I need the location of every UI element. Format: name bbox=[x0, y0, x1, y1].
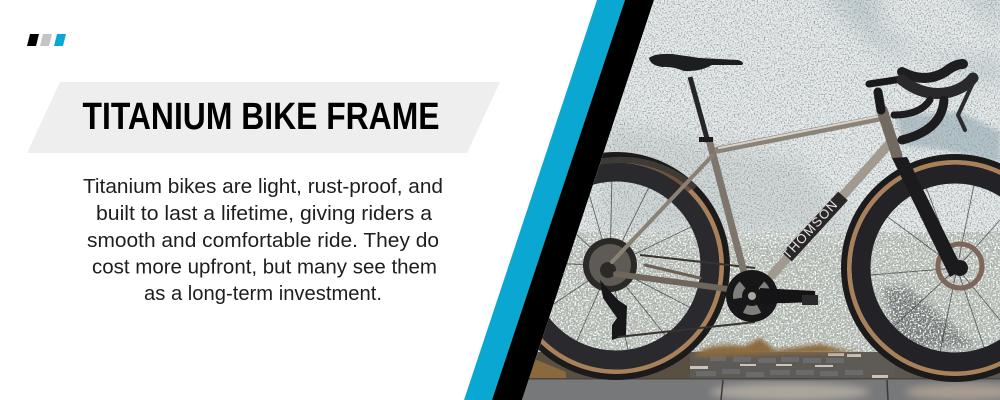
cassette and rear derailleur bbox=[583, 238, 637, 340]
description text: smooth and comfortable ride. They do bbox=[87, 229, 439, 252]
wall bbox=[500, 0, 1000, 365]
fork bbox=[892, 157, 963, 277]
blue diagonal stripe bbox=[464, 0, 625, 400]
chain bbox=[618, 255, 755, 337]
title banner bbox=[27, 82, 500, 153]
description text: Titanium bikes are light, rust-proof, and bbox=[83, 175, 443, 198]
description text bbox=[83, 175, 443, 305]
description text: cost more upfront, but many see them bbox=[92, 256, 437, 278]
frame logo: THOMSON bbox=[779, 197, 840, 262]
description text: as a long-term investment. bbox=[144, 282, 382, 305]
saddle bbox=[649, 54, 743, 71]
stem and handlebar bbox=[869, 64, 973, 140]
spokes bbox=[870, 180, 1000, 352]
titanium frame tubes bbox=[612, 110, 897, 295]
decorative three-bar icon bbox=[27, 34, 66, 46]
ground and cobbles bbox=[500, 338, 1000, 400]
spokes bbox=[554, 182, 692, 350]
seatpost bbox=[690, 77, 713, 142]
title: TITANIUM BIKE FRAME bbox=[82, 96, 440, 138]
front brake rotor bbox=[938, 244, 982, 288]
description text: built to last a lifetime, giving riders a bbox=[96, 202, 433, 225]
black diagonal stripe bbox=[492, 0, 654, 400]
front wheel bbox=[844, 157, 1000, 379]
photo: titanium gravel bike against a wall bbox=[500, 0, 1000, 400]
rear wheel bbox=[538, 152, 730, 380]
crankset bbox=[726, 270, 818, 322]
